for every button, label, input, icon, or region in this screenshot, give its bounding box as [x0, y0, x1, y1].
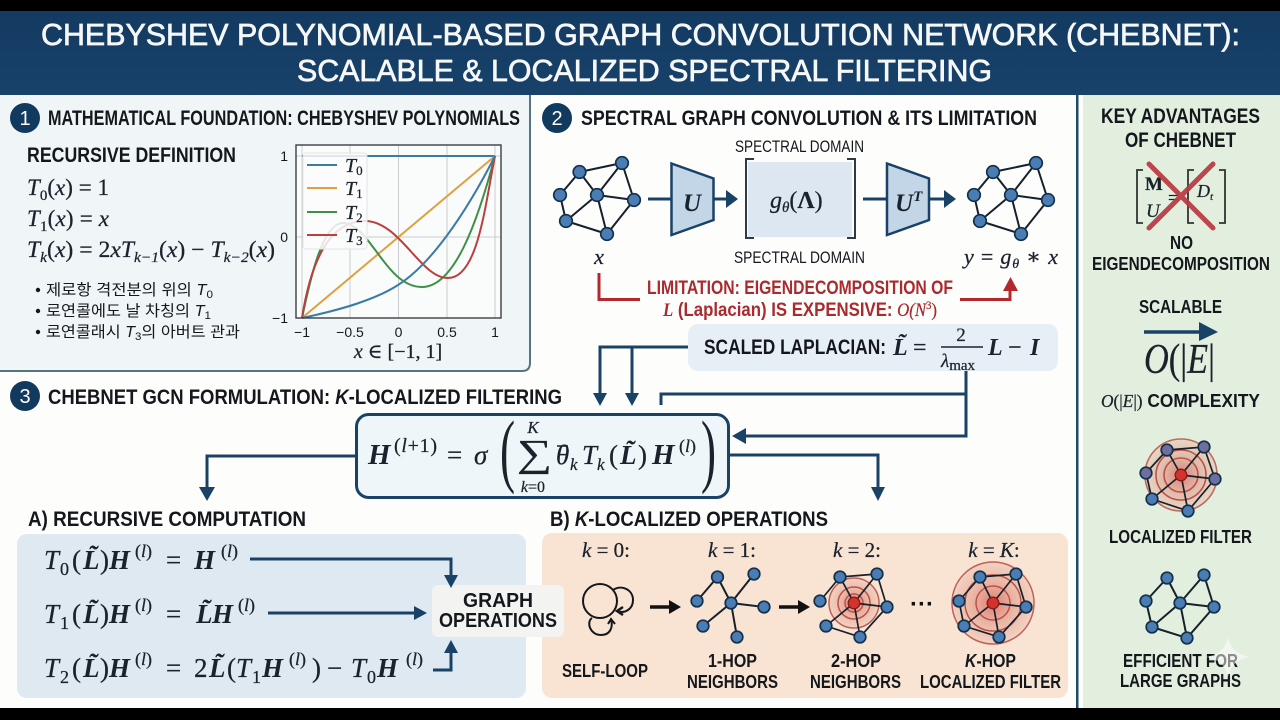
equation T0 — [44, 541, 238, 579]
k-hop label: LOCALIZED FILTER — [920, 672, 1061, 692]
main chebnet formula box: ( — [500, 405, 515, 496]
korean bullet notes: 제로항 격전분의 위의 T — [46, 282, 206, 299]
connector: laplacian to formula, right arrow — [661, 371, 966, 444]
localized filter label: LOCALIZED FILTER — [1109, 527, 1252, 547]
recursive definition equations: k — [40, 250, 47, 266]
limitation text: ) — [931, 300, 937, 321]
output label y: y = g — [964, 244, 1011, 269]
limitation text: 3 — [926, 298, 931, 312]
k labels: k = 2: — [833, 538, 881, 562]
limitation text: L (Laplacian) IS EXPENSIVE: O(N — [663, 300, 930, 321]
spectral filter box: Λ) — [797, 188, 823, 214]
localized filter icon — [1140, 439, 1221, 517]
limitation right red arrow — [960, 277, 1018, 300]
panel 1: mathematical foundation — [0, 95, 530, 371]
spectral filter box: g — [770, 188, 782, 214]
section 1 number badge: 1 — [19, 108, 31, 130]
equation T2: H — [108, 653, 131, 683]
equation T2: ) — [100, 653, 109, 683]
curve T0 — [302, 155, 495, 157]
panel B: k-localized operations — [542, 533, 1068, 698]
scaled laplacian box: − — [1008, 335, 1022, 361]
chart legend: 0 — [356, 163, 363, 178]
limitation text: LIMITATION: EIGENDECOMPOSITION OF — [647, 278, 953, 299]
output graph y — [968, 157, 1054, 240]
recursive definition equations: k−1 — [134, 250, 159, 266]
chart axis tick labels: −1 — [294, 324, 310, 340]
scaled laplacian box: SCALED LAPLACIAN: — [704, 336, 886, 359]
scaled laplacian box: 2 — [956, 325, 966, 346]
equation T2: 0 — [367, 667, 376, 687]
main chebnet formula box: (l) — [679, 436, 696, 457]
equation T2: H — [261, 653, 284, 683]
chart axis tick labels: 0 — [280, 229, 288, 245]
equation T1: 1 — [60, 613, 69, 633]
sub heading B: B) K-LOCALIZED OPERATIONS — [550, 508, 828, 531]
output label y: x — [1048, 244, 1058, 269]
equation T1: L̃ — [195, 599, 212, 629]
recursive definition equations: x) = x — [56, 206, 109, 231]
input label x: x — [593, 244, 604, 269]
equation T1 — [44, 595, 255, 633]
main chebnet formula box: k — [570, 455, 578, 474]
chart legend: 3 — [356, 233, 363, 248]
equation T0: 0 — [60, 559, 69, 579]
main chebnet formula box: K — [526, 418, 540, 437]
equation T2: 2 — [194, 653, 208, 683]
efficient label — [1120, 651, 1241, 691]
chart legend: T — [345, 225, 356, 247]
sparkle watermark — [1206, 637, 1250, 677]
equation T2: L̃ — [208, 653, 226, 683]
no eigendecomposition label: NO — [1170, 232, 1193, 253]
k-hop label: K-HOP — [965, 651, 1016, 671]
chart legend: T — [345, 155, 356, 177]
spectral domain label top: SPECTRAL DOMAIN — [735, 137, 864, 156]
equation T2: ) — [312, 653, 321, 683]
main chebnet formula box: ∑ — [517, 432, 552, 475]
arrow T1 to graph operations — [268, 606, 427, 620]
recursive definition equations: x) — [257, 237, 275, 262]
arrow T2 to graph operations — [433, 640, 458, 670]
U transpose trapezoid: T — [913, 189, 923, 205]
korean bullet notes: 3 — [135, 331, 141, 343]
equation T1: H — [211, 599, 234, 629]
chart axis tick labels: 0 — [395, 324, 403, 340]
equation T2: (l) — [406, 649, 423, 670]
chart axis tick labels: 1 — [280, 148, 288, 164]
scalable arrow — [1144, 322, 1218, 341]
scaled laplacian box: L — [987, 335, 1003, 361]
U transpose trapezoid — [887, 164, 929, 235]
U trapezoid: U — [683, 190, 703, 217]
chart axis tick labels — [272, 148, 499, 340]
korean bullet notes: 1 — [205, 310, 211, 322]
efficient label: EFFICIENT FOR — [1123, 651, 1238, 671]
section 3 number badge — [10, 381, 40, 411]
scaled laplacian box: λ — [940, 351, 949, 372]
efficient graph icon — [1140, 569, 1220, 644]
chebyshev line chart — [272, 145, 501, 363]
sidebar heading: OF CHEBNET — [1125, 129, 1236, 152]
equation T2: (l) — [135, 649, 152, 670]
equation T1: = — [166, 599, 181, 629]
equation T2: T — [351, 653, 368, 683]
equation T1: (l) — [135, 595, 152, 616]
equation T2: H — [376, 653, 399, 683]
equation T1: ) — [100, 599, 109, 629]
korean bullet notes: 의 아버트 관과 — [141, 323, 240, 341]
sidebar heading — [1101, 105, 1260, 152]
equation T1: T — [44, 599, 61, 629]
main chebnet formula box: k — [597, 455, 605, 474]
main chebnet formula box: ) — [701, 405, 716, 496]
recursive definition equations: T — [27, 206, 40, 231]
arrow T0 to graph operations — [250, 559, 458, 588]
recursive definition equations: x) − T — [167, 237, 223, 262]
k-hop label — [920, 651, 1061, 692]
main chebnet formula box: = — [447, 440, 462, 470]
section 1 heading: MATHEMATICAL FOUNDATION: CHEBYSHEV POLYNOMIALS — [48, 107, 520, 130]
curve T1 — [302, 156, 495, 318]
section 2 number badge: 2 — [551, 108, 563, 130]
equation T2 — [44, 649, 423, 687]
main chebnet formula box: ( — [609, 440, 618, 470]
scalable label: SCALABLE — [1139, 297, 1222, 317]
recursive definition equations: T — [27, 175, 40, 200]
recursive definition equations: x) = 1 — [55, 175, 109, 200]
connector: laplacian to formula, two down arrows — [593, 347, 688, 406]
crossed-out matrix icon: t — [1210, 191, 1214, 203]
chart axis tick labels: 1 — [491, 324, 499, 340]
equation T1: H — [108, 599, 131, 629]
equation T2: T — [44, 653, 61, 683]
equation T1: (l) — [238, 595, 255, 616]
chart x axis label: x ∈ [−1, 1] — [353, 341, 442, 363]
equation T0: L̃ — [82, 545, 100, 575]
panel: key advantages sidebar — [1076, 95, 1280, 708]
recursive definition equations: ( — [47, 175, 55, 200]
one hop graph — [691, 568, 770, 643]
title banner: SCALABLE & LOCALIZED SPECTRAL FILTERING — [297, 53, 992, 88]
korean bullet notes: 로연콜래시 T — [46, 324, 135, 341]
output label y: ∗ — [1020, 244, 1047, 269]
chart legend: T — [345, 202, 356, 224]
section 3 number badge: 3 — [19, 386, 31, 408]
two-hop label: NEIGHBORS — [810, 672, 901, 692]
input graph x — [554, 157, 640, 240]
limitation text — [647, 278, 953, 321]
main chebnet formula box: H — [367, 439, 392, 471]
equation T1: ( — [72, 599, 81, 629]
chart axis tick labels: −1 — [272, 310, 288, 326]
chart legend — [303, 153, 367, 249]
recursive definition equations: 0 — [40, 188, 47, 204]
connector: formula to k-localized operations — [728, 455, 885, 501]
korean bullet notes — [36, 281, 240, 343]
k labels: k = 1: — [708, 538, 756, 562]
equation T0: (l) — [221, 541, 238, 562]
arrow into U transpose — [863, 198, 887, 200]
efficient label: LARGE GRAPHS — [1120, 671, 1241, 691]
recursive definition equations: ( — [48, 206, 55, 231]
spectral filter box: θ — [782, 200, 790, 216]
graph operations box: OPERATIONS — [439, 610, 557, 632]
limitation left red bracket — [599, 273, 640, 300]
equation T2: − — [327, 653, 342, 683]
chart axis tick labels: 0.5 — [437, 324, 457, 340]
main chebnet formula box — [356, 405, 728, 498]
arrow U to filter — [714, 190, 738, 208]
equation T2: 2 — [60, 667, 69, 687]
equation T0: H — [193, 545, 216, 575]
one-hop label: 1-HOP — [708, 651, 757, 671]
curve T3 — [302, 156, 495, 318]
one-hop label — [687, 651, 778, 692]
complexity label: O(|E|) COMPLEXITY — [1101, 391, 1260, 412]
recursive definition heading: RECURSIVE DEFINITION — [27, 144, 236, 167]
U trapezoid — [672, 164, 714, 235]
equation T2: ( — [72, 653, 81, 683]
recursive definition equations: 1 — [40, 219, 47, 235]
section 1 number badge — [10, 103, 40, 133]
section 2 heading: SPECTRAL GRAPH CONVOLUTION & ITS LIMITATION — [581, 107, 1037, 130]
equation T0: ( — [72, 545, 81, 575]
equation T0: T — [44, 545, 61, 575]
k hop graph with rings — [952, 562, 1034, 644]
connector: formula to recursive computation — [199, 456, 356, 501]
crossed-out matrix icon: D — [1197, 181, 1210, 201]
panel A: recursive computation — [17, 534, 564, 698]
arrow k0 to k1 — [650, 600, 681, 614]
two-hop label: 2-HOP — [831, 651, 881, 671]
scaled laplacian box: = — [913, 335, 927, 361]
equation T0: ) — [100, 545, 109, 575]
main chebnet formula box: ) — [638, 440, 647, 470]
sub heading A: A) RECURSIVE COMPUTATION — [28, 508, 306, 531]
spectral filter box: ( — [789, 188, 797, 214]
two-hop label — [810, 651, 901, 692]
self loop icon — [583, 584, 633, 635]
title banner — [0, 11, 1280, 95]
arrow into U — [648, 198, 671, 200]
equation T2: L̃ — [82, 653, 100, 683]
chart legend: 2 — [356, 210, 363, 225]
scaled laplacian box — [688, 324, 1058, 374]
recursive definition equations: ( — [159, 237, 167, 262]
main chebnet formula box: (l+1) — [394, 435, 437, 457]
main chebnet formula box: L̃ — [619, 440, 636, 470]
equation T1: L̃ — [82, 599, 100, 629]
main chebnet formula box: θ — [556, 440, 569, 470]
korean bullet notes: 0 — [206, 289, 213, 301]
recursive definition equations: x) = 2xT — [55, 237, 133, 262]
equation T2: (l) — [289, 649, 306, 670]
equation T2: 1 — [252, 667, 261, 687]
recursive definition equations: ( — [249, 237, 257, 262]
arrow to output graph — [929, 190, 956, 208]
ellipsis: ··· — [910, 591, 934, 618]
output label y: θ — [1012, 257, 1019, 272]
k labels: k = K: — [968, 538, 1020, 562]
crossed-out matrix icon — [1137, 164, 1225, 228]
panel 2: spectral graph convolution — [542, 103, 1058, 374]
graph operations box — [432, 585, 564, 637]
main chebnet formula box: H — [651, 439, 676, 471]
two hop graph with rings — [814, 568, 893, 643]
korean bullet notes: 로연콜에도 날 차칭의 T — [46, 303, 204, 320]
graph operations box: GRAPH — [463, 590, 533, 612]
curve T2 — [302, 156, 495, 318]
equation T0: (l) — [135, 541, 152, 562]
recursive definition equations — [27, 175, 275, 266]
main chebnet formula box: k=0 — [521, 479, 545, 496]
section 3 heading: CHEBNET GCN FORMULATION: K-LOCALIZED FILTERING — [48, 386, 562, 409]
chart legend: 1 — [356, 186, 363, 201]
recursive definition equations: k−2 — [224, 250, 249, 266]
k labels — [582, 538, 1020, 562]
scaled laplacian box: max — [949, 358, 976, 374]
no eigendecomposition label — [1092, 232, 1270, 274]
arrow k1 to k2 — [779, 600, 810, 614]
U transpose trapezoid: U — [895, 190, 913, 217]
crossed-out matrix icon: M — [1145, 174, 1163, 195]
recursive definition equations: ( — [47, 237, 55, 262]
recursive definition equations: T — [27, 237, 40, 262]
chart legend: T — [345, 178, 356, 200]
one-hop label: NEIGHBORS — [687, 672, 778, 692]
blue curve — [302, 156, 495, 318]
title banner: CHEBYSHEV POLYNOMIAL-BASED GRAPH CONVOLUTION NETWORK (CHEBNET): — [41, 17, 1240, 52]
crossed-out matrix icon: U — [1146, 201, 1161, 222]
main chebnet formula box: T — [582, 440, 599, 470]
section 2 number badge — [542, 103, 572, 133]
equation T0: H — [108, 545, 131, 575]
scaled laplacian box: I — [1029, 335, 1041, 361]
scaled laplacian box: L̃ — [892, 335, 908, 361]
self-loop label: SELF-LOOP — [562, 661, 648, 681]
k labels: k = 0: — [582, 538, 630, 562]
main chebnet formula box: σ — [474, 440, 489, 470]
equation T2: = — [166, 653, 181, 683]
big-O expression: O(|E| — [1144, 337, 1215, 383]
equation T2: ( — [227, 653, 236, 683]
spectral filter box — [746, 159, 855, 238]
spectral domain label bottom: SPECTRAL DOMAIN — [734, 248, 865, 267]
equation T2: T — [236, 653, 253, 683]
chart axis tick labels: −0.5 — [336, 324, 364, 340]
equation T0: = — [166, 545, 181, 575]
crossed-out matrix icon: = — [1168, 188, 1179, 209]
